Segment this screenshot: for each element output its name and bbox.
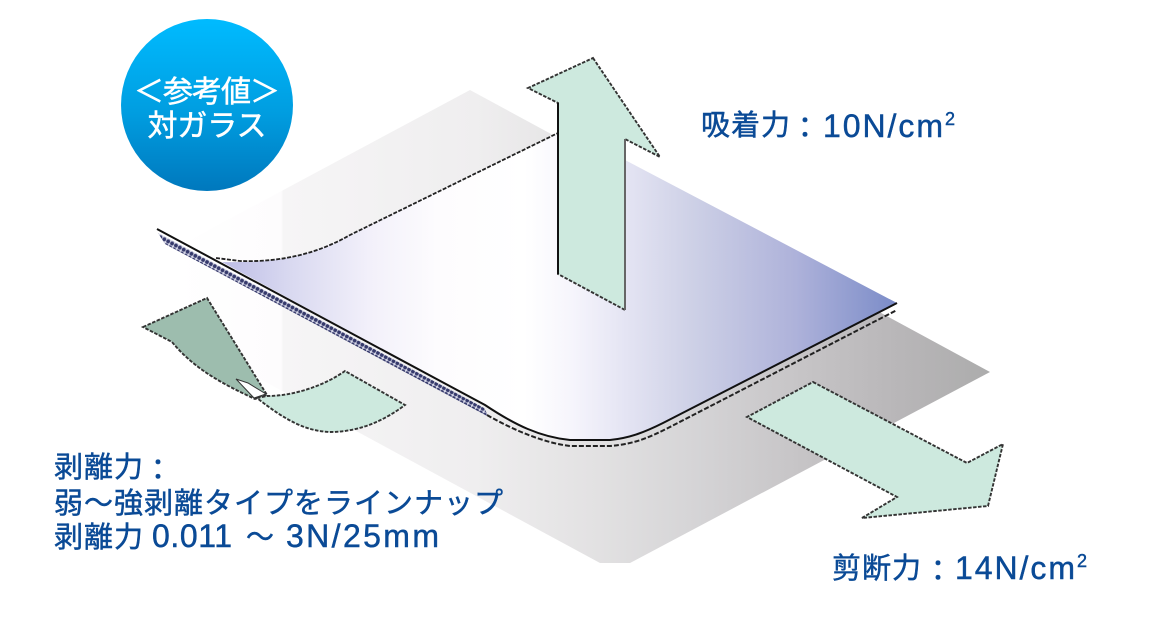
sheet layered edge band (158, 233, 489, 417)
label: peel force (54, 451, 503, 554)
label: shear force (832, 550, 1087, 588)
sheet surface (222, 129, 897, 440)
arrow: peel force curved (143, 298, 405, 432)
label: peel force: 3N/25mm (286, 518, 439, 554)
label: suction force (701, 108, 955, 145)
label: shear force: 2 (1077, 551, 1087, 571)
label: peel force: ： (143, 455, 173, 487)
label: peel force: 剥離力 (54, 451, 143, 484)
label: peel force: 弱～強剥離タイプをラインナップ (54, 487, 503, 520)
peel arrow front (257, 371, 405, 432)
adhesive sheet with peeled corner (157, 129, 897, 446)
peel arrow back fold (143, 298, 267, 399)
label: shear force: 14N/cm (955, 550, 1075, 586)
badge: reference value against glass (121, 19, 293, 191)
label: suction force: ： (790, 113, 820, 145)
label: peel force: 剥離力 (54, 521, 143, 554)
badge text line 2: 対ガラス (148, 110, 266, 143)
sheet left upper edge (216, 133, 558, 261)
label: suction force: 2 (945, 109, 955, 129)
label: peel force: 0.011 (152, 518, 232, 554)
peel arrow fold highlight (236, 379, 266, 398)
badge text line 1: ＜参考値＞ (134, 76, 280, 109)
label: suction force: 10N/cm (823, 108, 943, 144)
arrow: suction force upward (528, 58, 660, 310)
label: shear force: ： (923, 556, 953, 588)
sheet top edge line (157, 229, 897, 440)
label: shear force: 剪断力 (832, 552, 921, 585)
sheet lower edge line (487, 310, 897, 446)
label: suction force: 吸着力 (701, 109, 790, 142)
shadow: grey shadow under the sheet (175, 90, 990, 563)
arrow: shear force to the right (747, 382, 1003, 518)
label: peel force: ～ (246, 522, 274, 554)
